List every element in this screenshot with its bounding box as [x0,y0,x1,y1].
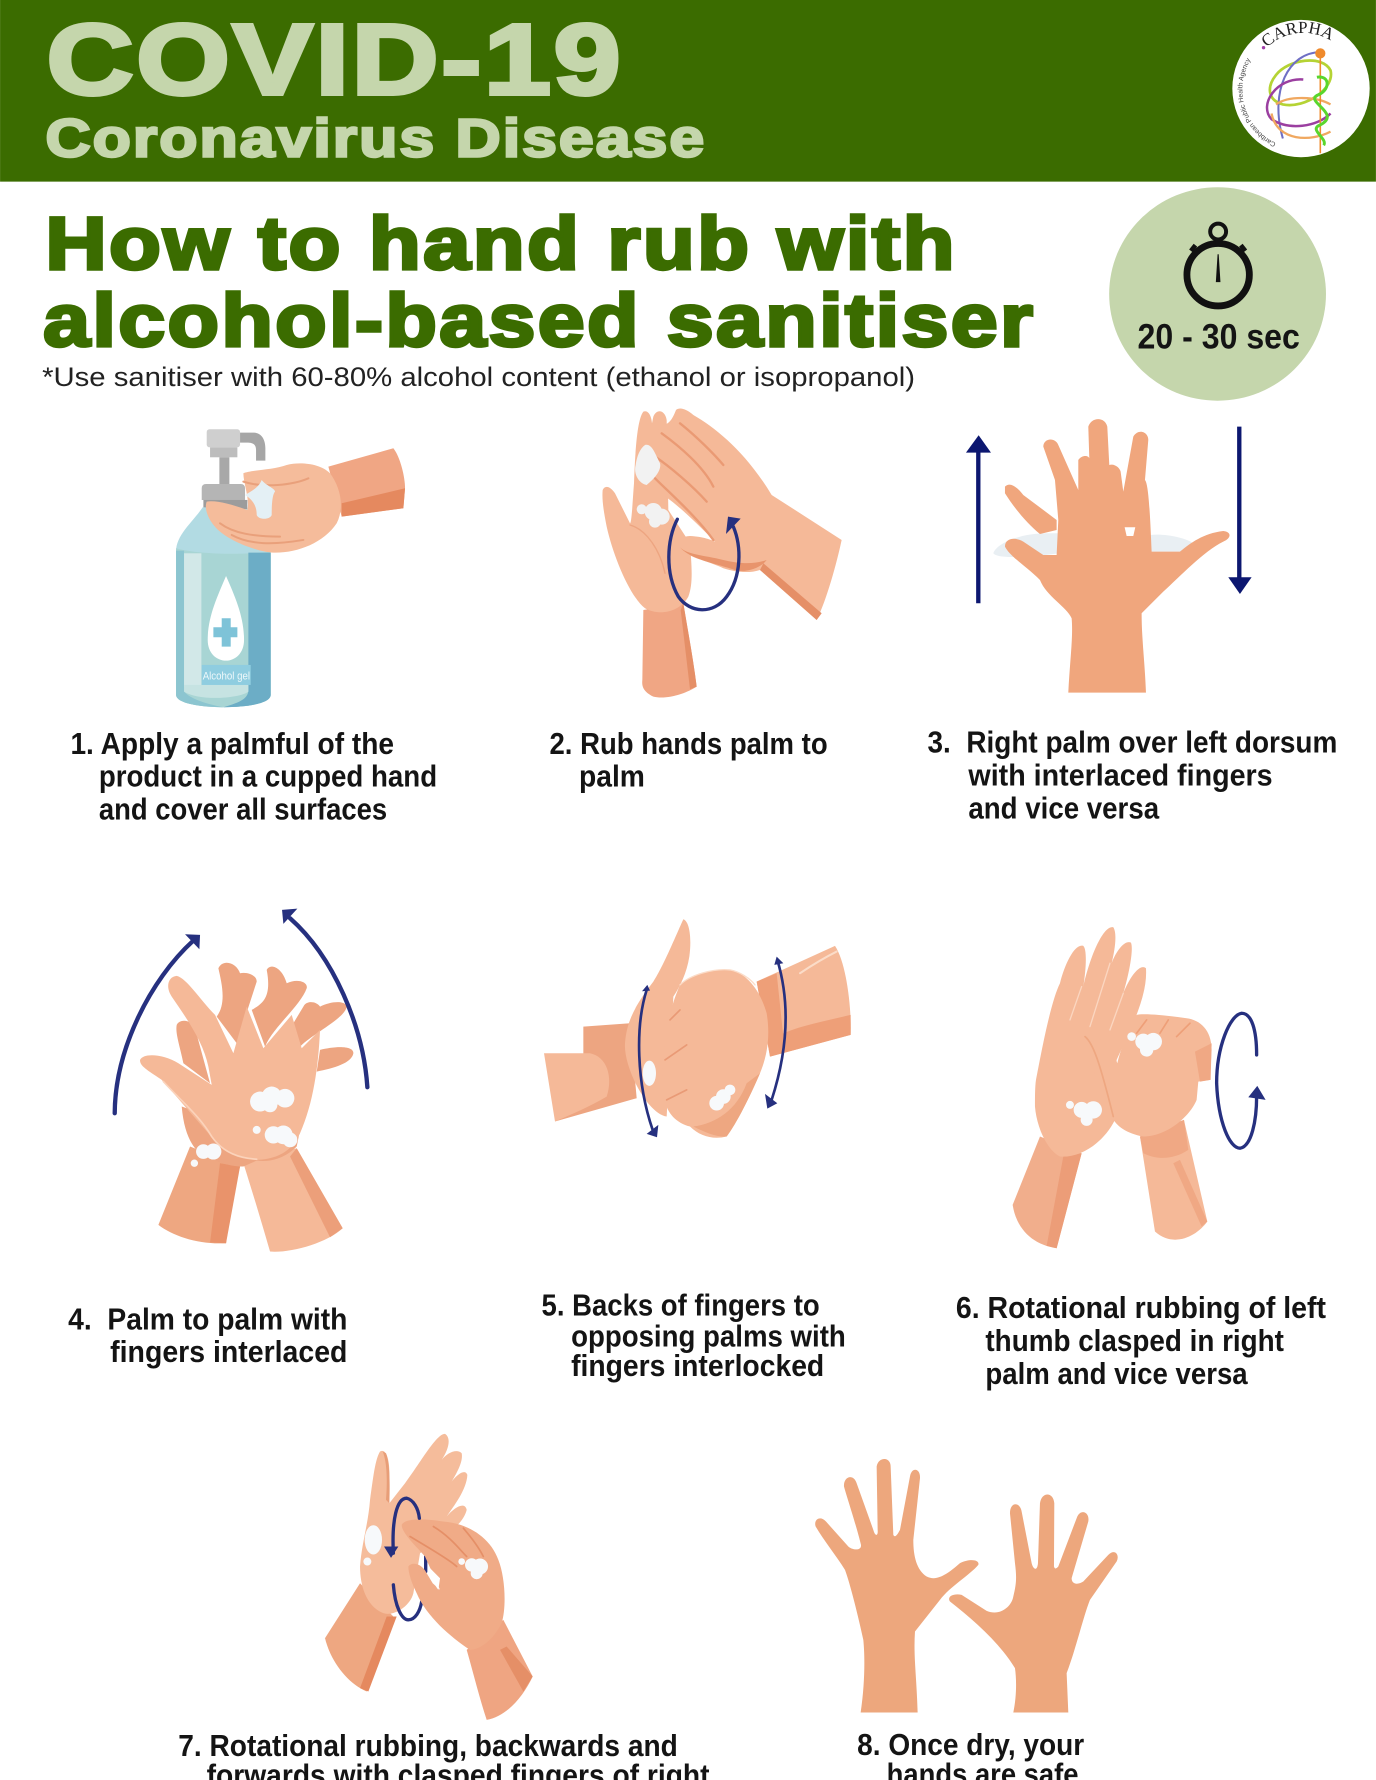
step 7 illustration: clasped fingers [325,1434,533,1720]
step 5 caption: 5. Backs of fingers to [542,1289,820,1323]
arrow: up [966,435,991,603]
step 1 caption [70,727,437,827]
cupped hand [206,448,405,553]
logo: CARPHA [1232,20,1370,158]
arrow: right curve [765,957,786,1109]
arrow: lower part of rotation [393,1557,426,1620]
note: sanitiser alcohol content: *Use sanitiser with 60-80% alcohol content (ethanol or isopropanol) [42,362,915,392]
step 1 caption: 1. Apply a palmful of the [70,727,394,761]
timer label: 20 - 30 sec [1138,318,1300,357]
step 6 caption: thumb clasped in right [985,1324,1284,1358]
bottle: Alcohol gel [203,670,250,682]
step 3 illustration: palm over dorsum [966,419,1252,693]
step 3 caption: 3. Right palm over left dorsum [928,726,1337,760]
step 1 caption: and cover all surfaces [99,793,387,827]
heading: How to hand rub with alcohol-based sanitiser [43,202,1035,362]
step 6 caption: 6. Rotational rubbing of left [956,1291,1326,1325]
logo: CARPHA: CARPHA [1262,22,1331,46]
step 1 illustration: sanitiser bottle and cupped hand [176,429,405,707]
arrow: right arc [282,909,367,1087]
arrow: down [1228,427,1252,594]
step 4 illustration: fingers interlaced [115,909,367,1252]
logo: CARPHA: Caribbean Public Health Agency [1237,58,1276,146]
arrow: rotation [1217,1013,1266,1148]
step 7 caption: 7. Rotational rubbing, backwards and [178,1729,678,1763]
step 6 caption: palm and vice versa [985,1357,1249,1391]
step 2 illustration: palm to palm [602,409,842,697]
header banner [0,0,1376,182]
step 5 caption: fingers interlocked [571,1349,824,1383]
step 3 caption: with interlaced fingers [967,759,1273,793]
step 5 illustration: backs of fingers [544,919,851,1138]
arrow: upper part of rotation [384,1498,419,1558]
step 6 illustration: thumb rotation [1013,927,1266,1248]
step 2 caption: 2. Rub hands palm to [550,727,828,761]
title: COVID-19: COVID-19 [47,5,623,116]
arrow: left arc [115,934,200,1113]
step 6 caption [956,1291,1326,1391]
step 3 caption [928,726,1337,825]
icon: stopwatch [1187,224,1249,306]
heading: How to hand rub with alcohol-based sanitiser: alcohol-based sanitiser [43,279,1035,362]
arrow: left curve [639,985,658,1137]
step 8 caption: 8. Once dry, your [857,1728,1084,1762]
step 4 caption: 4. Palm to palm with [68,1302,347,1336]
heading: How to hand rub with alcohol-based sanitiser: How to hand rub with [45,202,957,285]
step 7 caption [178,1729,710,1780]
subtitle: Coronavirus Disease: Coronavirus Disease [45,110,706,169]
step 5 caption [542,1289,846,1383]
step 8 caption [857,1728,1084,1780]
arrow: circular rubbing [669,517,741,610]
step 5 caption: opposing palms with [571,1319,846,1353]
step 8 illustration: two clean hands [815,1459,1118,1713]
step 2 caption [550,727,828,794]
step 3 caption: and vice versa [968,791,1160,825]
pump [202,429,265,509]
bottle [176,507,271,707]
timer badge [1109,187,1326,401]
step 4 caption: fingers interlaced [110,1335,347,1369]
step 2 caption: palm [579,760,645,794]
step 1 caption: product in a cupped hand [99,760,437,794]
step 4 caption [68,1302,347,1369]
